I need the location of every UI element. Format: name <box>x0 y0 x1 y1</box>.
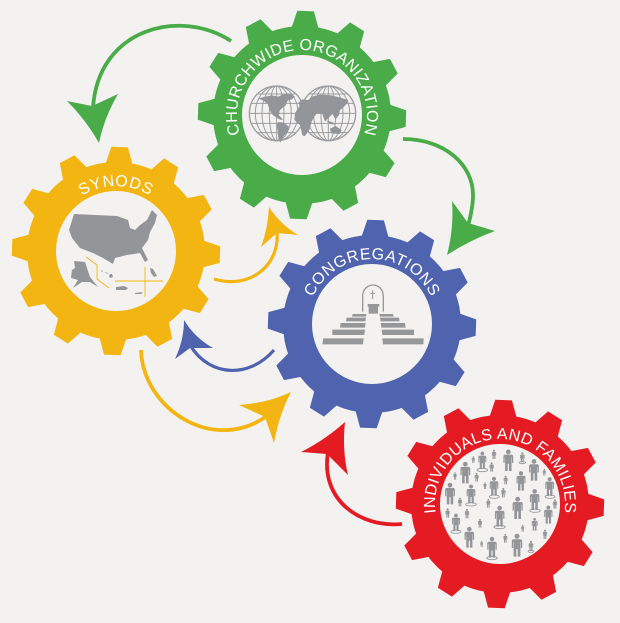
yellow gear inner circle <box>56 191 176 311</box>
arrow: churchwide to congregations <box>403 139 495 255</box>
icon: crowd of people <box>445 449 557 560</box>
icon: altar and steps <box>322 285 424 344</box>
arrow: synods to churchwide <box>214 207 298 282</box>
red gear inner circle <box>440 444 560 564</box>
gear: congregations <box>268 220 476 428</box>
arrow: congregations to synods <box>175 320 274 370</box>
green gear inner circle <box>242 55 362 175</box>
icon: united states map <box>69 210 163 297</box>
arrow: individuals to congregations <box>301 422 402 524</box>
label: synods: SYNODS <box>78 175 153 194</box>
gear: individuals and families <box>396 400 604 608</box>
blue gear inner circle <box>312 264 432 384</box>
gear: churchwide organization <box>198 10 406 220</box>
arrow: synods to congregations <box>141 350 291 443</box>
label: individuals and families: INDIVIDUALS AND FAMILIES <box>424 428 576 513</box>
arrow: churchwide to synods <box>67 26 231 143</box>
green gear shape <box>198 11 406 219</box>
yellow gear shape <box>12 147 220 355</box>
label: churchwide organization: CHURCHWIDE ORGANIZATION <box>226 38 378 136</box>
red gear shape <box>396 400 604 608</box>
gear: synods <box>12 146 220 356</box>
icon: world globes <box>249 86 356 143</box>
blue gear shape <box>268 220 476 428</box>
label: congregations: CONGREGATIONS <box>305 248 440 295</box>
